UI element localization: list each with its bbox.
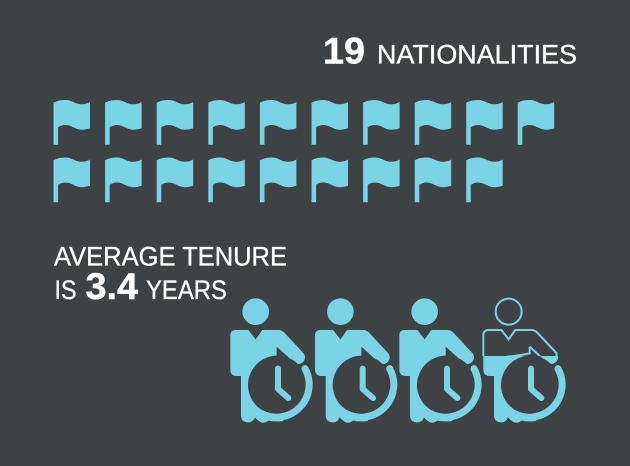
icon: person with clock 4, partly filled (483, 299, 562, 423)
heading: average tenure: YEARS (146, 275, 227, 305)
heading: average tenure (54, 242, 287, 307)
icon: person with clock 1 (230, 298, 309, 423)
flag grid: 19 flags (54, 100, 554, 202)
heading: 19 nationalities: 19 (323, 30, 365, 72)
heading: average tenure: 3.4 (86, 266, 138, 307)
heading: average tenure: IS (54, 275, 76, 305)
icon: person with clock 3 (399, 298, 478, 423)
icon: person with clock 2 (315, 298, 394, 423)
heading: average tenure: AVERAGE TENURE (54, 242, 287, 272)
heading: 19 nationalities (323, 30, 577, 72)
heading: 19 nationalities: NATIONALITIES (377, 40, 577, 70)
